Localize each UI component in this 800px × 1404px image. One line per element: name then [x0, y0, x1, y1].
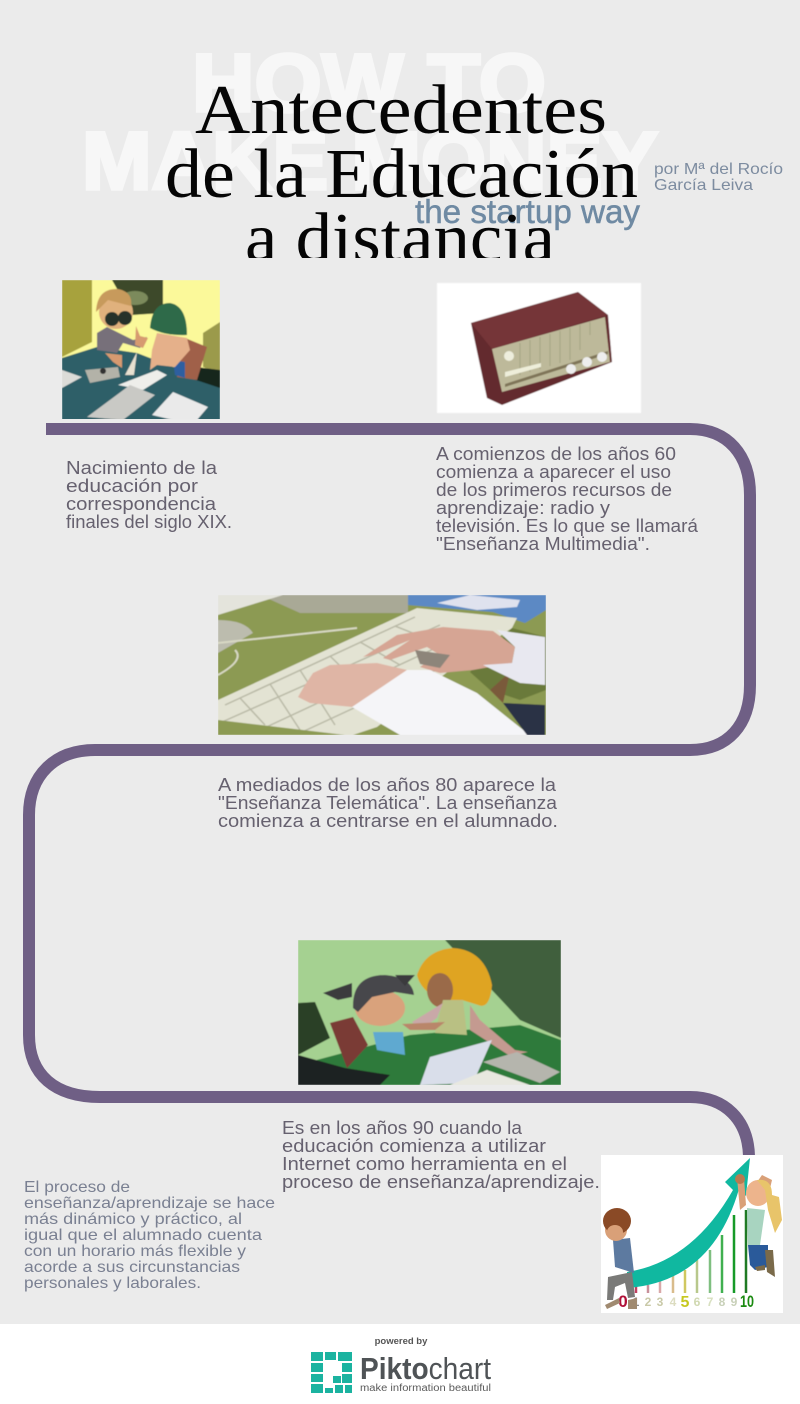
text: multimedia teaching: comienza a aparecer el uso	[436, 462, 671, 482]
text: telematic teaching: A mediados de los años 80 aparece la	[218, 775, 557, 795]
growth arrow	[627, 1158, 750, 1288]
image: progress arrow with characters	[601, 1155, 783, 1313]
watermark subheading: the startup way	[415, 193, 641, 230]
text: correspondence education: educación por	[66, 476, 198, 496]
title: de la Educación	[165, 136, 638, 213]
image: students with tutor	[62, 280, 220, 420]
image: radio	[437, 283, 641, 413]
footer: Piktochart logo mark	[311, 1352, 352, 1393]
scale numbers: 3	[657, 1295, 664, 1309]
footer: Piktochart wordmark: Piktochart	[360, 1351, 491, 1386]
text: correspondence education	[66, 458, 232, 532]
scale numbers: 5	[681, 1294, 690, 1311]
happy girl	[735, 1174, 782, 1277]
scale numbers: 6	[694, 1295, 701, 1309]
text: multimedia teaching: de los primeros recursos de	[436, 480, 672, 500]
title: Antecedentes	[195, 72, 607, 149]
title: a distancia	[245, 200, 555, 277]
text: telematic teaching	[218, 775, 558, 831]
text: correspondence education: correspondencia	[66, 494, 217, 514]
title	[168, 84, 637, 258]
text: correspondence education: Nacimiento de la	[66, 458, 218, 478]
footer: powered by: powered by	[375, 1336, 428, 1347]
text: multimedia teaching	[436, 444, 699, 554]
author: por Mª del Rocío	[654, 161, 783, 178]
scale numbers: 4	[670, 1295, 677, 1309]
text: multimedia teaching: aprendizaje: radio y	[436, 498, 610, 518]
footer band	[0, 1324, 800, 1404]
text: multimedia teaching: A comienzos de los años 60	[436, 444, 676, 464]
watermark heading	[82, 38, 658, 207]
scale numbers: 1	[633, 1295, 640, 1309]
footer: tagline: make information beautiful	[360, 1383, 491, 1394]
scale numbers: 9	[731, 1295, 738, 1309]
scale numbers: 8	[719, 1295, 726, 1309]
image: children at laptop	[298, 940, 561, 1085]
text: telematic teaching: "Enseñanza Telemática". La enseñanza	[218, 793, 558, 813]
text: internet in education: educación comienza a utilizar	[282, 1136, 546, 1156]
author	[654, 161, 783, 194]
text: multimedia teaching: "Enseñanza Multimedia".	[436, 534, 650, 554]
watermark heading: HOW TO	[192, 38, 546, 129]
text: internet in education: proceso de enseñanza/aprendizaje.	[282, 1172, 600, 1192]
progress scale bars	[636, 1210, 746, 1293]
text: correspondence education: finales del siglo XIX.	[66, 512, 232, 532]
timeline path	[29, 429, 750, 1156]
scale numbers: 10	[740, 1292, 754, 1311]
text: conclusion: igual que el alumnado cuenta	[24, 1227, 262, 1244]
scale numbers	[618, 1292, 754, 1311]
scale numbers: 2	[645, 1295, 652, 1309]
scale numbers: 0	[618, 1292, 628, 1311]
text: telematic teaching: comienza a centrarse en el alumnado.	[218, 811, 558, 831]
author: García Leiva	[654, 177, 753, 194]
text: conclusion: con un horario más flexible y	[24, 1243, 246, 1260]
text: conclusion: enseñanza/aprendizaje se hace	[24, 1195, 275, 1212]
watermark heading: MAKE MONEY	[82, 116, 658, 207]
image: hands on keyboard	[218, 595, 546, 735]
text: conclusion: personales y laborales.	[24, 1275, 201, 1292]
text: internet in education: Es en los años 90 cuando la	[282, 1118, 523, 1138]
sad boy	[603, 1208, 637, 1309]
text: internet in education: Internet como herramienta en el	[282, 1154, 567, 1174]
text: internet in education	[282, 1118, 600, 1192]
text: conclusion	[24, 1179, 275, 1292]
scale numbers: 7	[707, 1295, 714, 1309]
text: multimedia teaching: televisión. Es lo que se llamará	[436, 516, 699, 536]
text: conclusion: acorde a sus circunstancias	[24, 1259, 240, 1276]
text: conclusion: El proceso de	[24, 1179, 130, 1196]
text: conclusion: más dinámico y práctico, al	[24, 1211, 242, 1228]
